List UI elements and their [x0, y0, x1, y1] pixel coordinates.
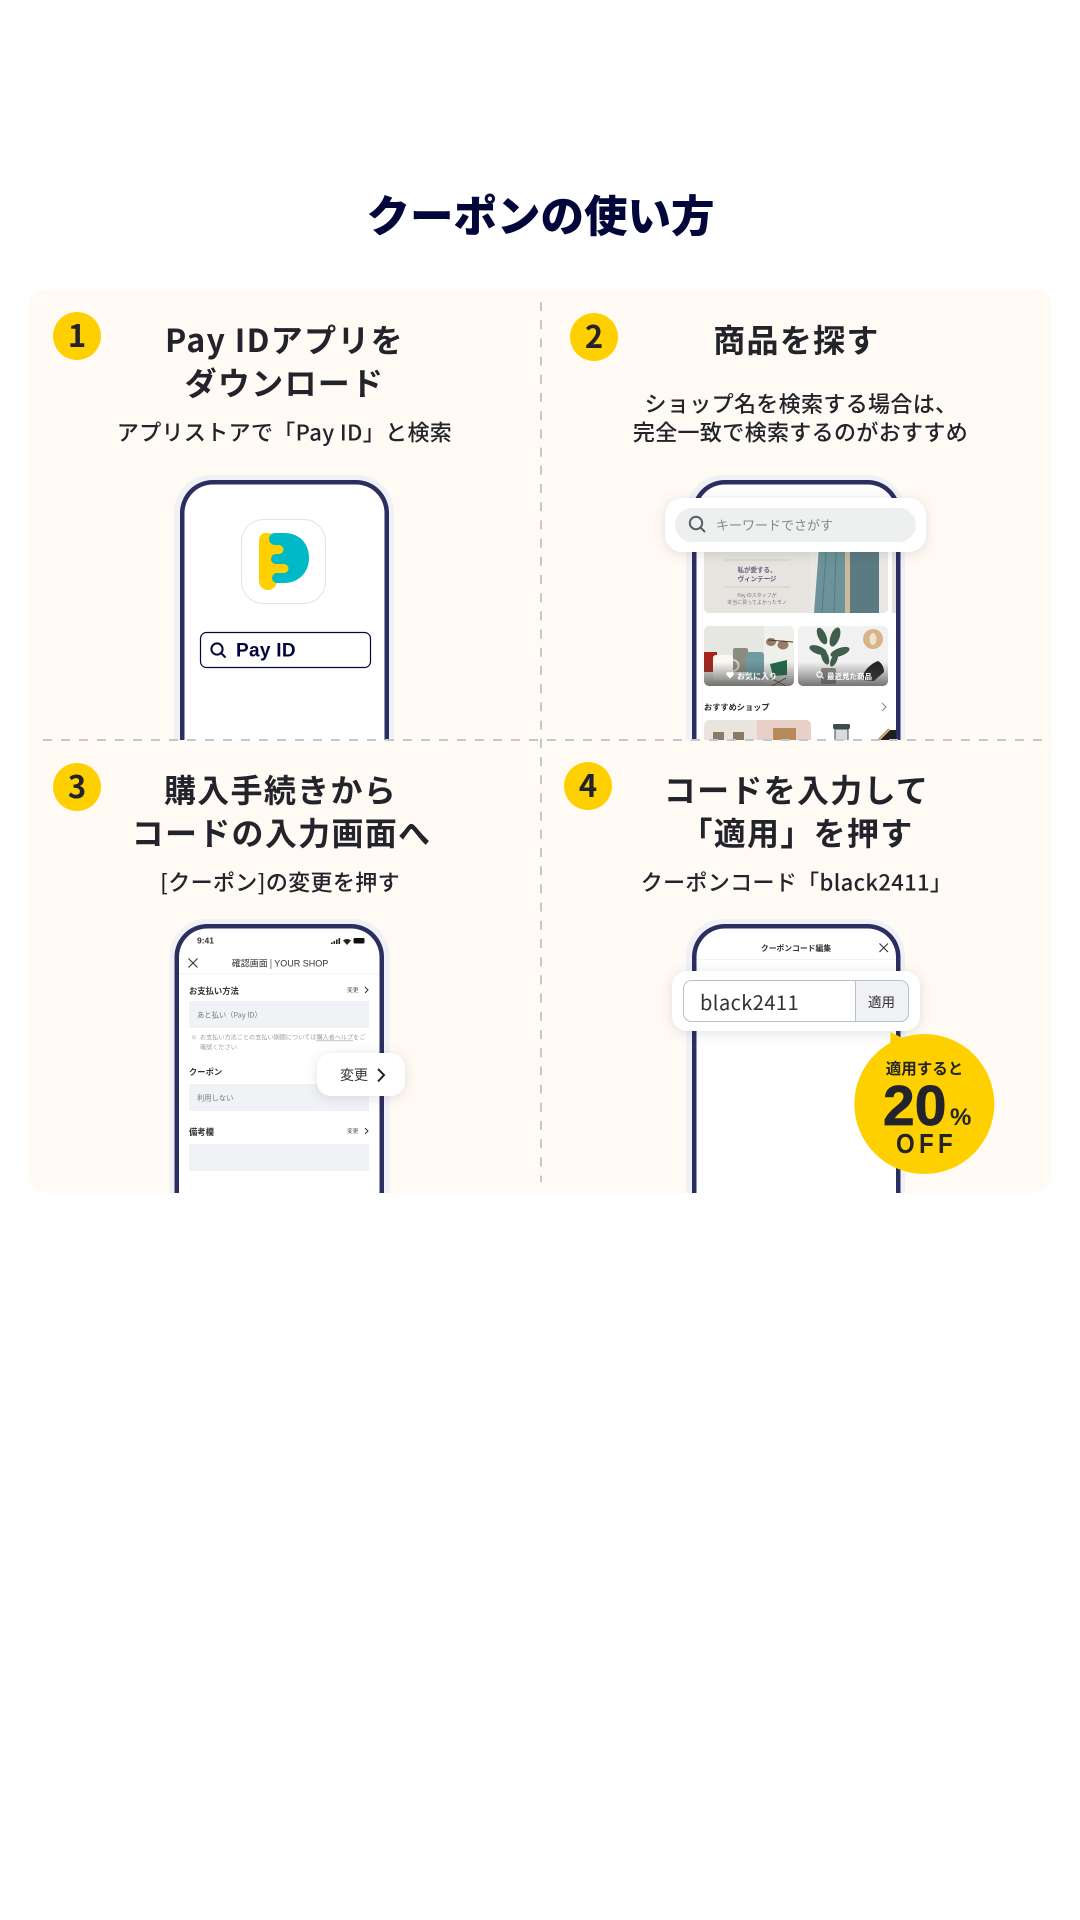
icon: Pay ID app [242, 520, 326, 604]
payment section: 確認ください [200, 1042, 237, 1052]
panel: step 2 [570, 313, 966, 740]
heading: step 2: 商品を探す [713, 316, 880, 362]
heading: step 1 [165, 316, 404, 405]
tile: favourites: お気に入り [737, 671, 777, 682]
step number 4: 4 [579, 761, 597, 806]
heading: step 4 [664, 766, 929, 855]
nav bar [179, 956, 380, 974]
search bar popup [665, 498, 926, 552]
discount badge: 20 [883, 1074, 946, 1138]
discount badge: OFF [896, 1127, 957, 1159]
heading: step 3: 購入手続きから [164, 766, 397, 812]
payment section [189, 985, 369, 1052]
search box [200, 632, 370, 668]
heading: step 3: コードの入力画面へ [132, 809, 431, 855]
step number 2: 2 [585, 312, 603, 357]
coupon section: 利用しない [197, 1094, 233, 1104]
section label: recommended shops [704, 702, 887, 712]
description: step 3: [クーポン]の変更を押す [160, 866, 400, 898]
banner: vintage: 本当に買ってよかったモノ [727, 599, 787, 606]
payment section: 変更 [347, 985, 359, 994]
payment section: お支払い方法ごとの支払い期間については購入者ヘルプをご [200, 1032, 365, 1042]
shop tiles [704, 720, 896, 740]
step number 2 [570, 312, 618, 361]
step number 3 [53, 762, 101, 811]
description: step 1: アプリストアで「Pay ID」と検索 [117, 416, 452, 448]
banner: vintage: ヴィンテージ [738, 573, 777, 583]
heading: step 4: 「適用」を押す [680, 809, 914, 855]
phone mockup: coupon entry: クーポンコード編集 [761, 943, 831, 954]
change button popup [317, 1053, 405, 1096]
payment section: あと払い（Pay ID） [197, 1010, 262, 1020]
coupon code input popup: black2411 [700, 987, 799, 1016]
search box: Pay ID [236, 640, 296, 662]
panel: step 1 [53, 311, 452, 884]
discount badge: 適用すると [886, 1057, 963, 1079]
tile: recently viewed: 最近見た商品 [827, 671, 872, 682]
coupon code input popup [672, 971, 920, 1031]
description: step 2: 完全一致で検索するのがおすすめ [633, 416, 968, 448]
coupon section: クーポン [189, 1066, 222, 1078]
banner: vintage: 私が愛する、 [738, 564, 776, 574]
step number 1: 1 [68, 311, 86, 356]
description: step 4: クーポンコード「black2411」 [641, 866, 952, 898]
coupon section [189, 1066, 369, 1111]
discount badge: % [950, 1104, 971, 1131]
panel: step 4 [564, 762, 994, 1193]
discount badge [854, 1032, 994, 1174]
tile: favourites [704, 626, 794, 686]
panel: step 3 [53, 763, 429, 1193]
notes section: 備考欄 [189, 1126, 214, 1138]
phone mockup: coupon entry [686, 919, 905, 1193]
payment section: ※ [191, 1032, 197, 1042]
status bar [197, 938, 364, 945]
status bar: 9:41 [197, 936, 214, 946]
step number 4 [564, 761, 612, 810]
step number 1 [53, 311, 101, 360]
search bar popup: キーワードでさがす [716, 515, 833, 534]
heading: step 3 [132, 766, 431, 855]
phone mockup: shop home [686, 475, 905, 740]
payment section: お支払い方法 [189, 985, 239, 997]
section label: recommended shops: おすすめショップ [704, 701, 770, 713]
nav bar: 確認画面 | YOUR SHOP [232, 956, 328, 970]
title: クーポンの使い方 [366, 182, 714, 245]
notes section: 変更 [347, 1126, 359, 1135]
change button popup: 変更 [340, 1065, 368, 1085]
tile: recently viewed [798, 626, 888, 686]
coupon code input popup: 適用 [868, 991, 895, 1011]
heading: step 4: コードを入力して [664, 766, 929, 812]
phone mockup: app search [174, 475, 394, 740]
banner: vintage: Pay IDスタッフが [737, 592, 777, 599]
phone mockup: checkout [170, 919, 390, 1193]
heading: step 1: Pay IDアプリを [165, 316, 404, 362]
description: step 2 [633, 387, 968, 448]
banner: vintage [704, 552, 896, 613]
heading: step 1: ダウンロード [185, 359, 384, 405]
notes section [189, 1126, 369, 1171]
description: step 2: ショップ名を検索する場合は、 [645, 387, 957, 419]
step number 3: 3 [68, 762, 86, 807]
panel: steps background [28, 289, 1052, 1193]
